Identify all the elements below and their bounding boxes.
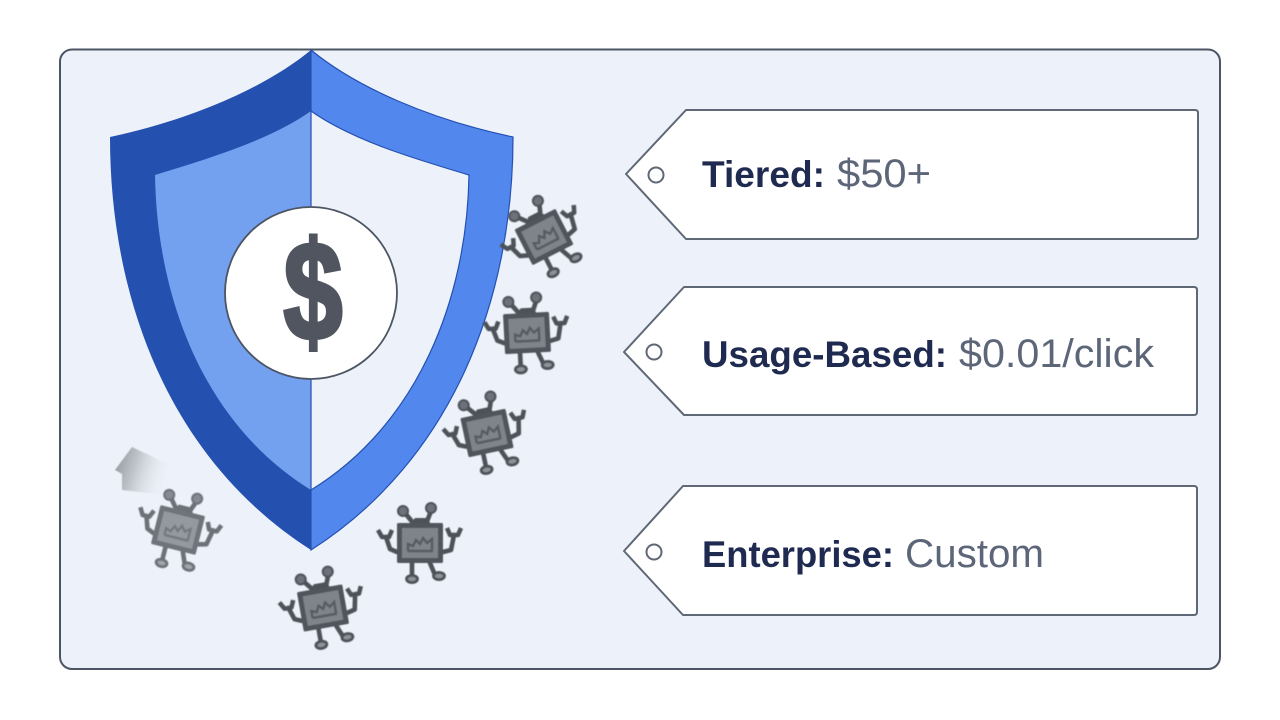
price tag: Tiered bbox=[626, 110, 1198, 239]
icon: broken robot fragment bbox=[115, 447, 176, 496]
price tag: Tiered: $50+ bbox=[837, 152, 931, 196]
dollar medallion: $ bbox=[284, 214, 342, 370]
icon: robot 5 bbox=[275, 561, 370, 654]
icon: robot 1 bbox=[488, 183, 599, 291]
price tag: Tiered: Tiered: bbox=[702, 154, 825, 195]
dollar medallion bbox=[225, 207, 397, 379]
price tag: Enterprise bbox=[624, 486, 1197, 615]
shield outer right half bbox=[311, 50, 513, 550]
price tag: Usage-Based: Usage-Based: bbox=[702, 334, 947, 375]
icon: shield with dollar bbox=[110, 50, 513, 550]
price tag: Usage-Based bbox=[624, 287, 1197, 415]
icon: robot 2 bbox=[483, 291, 570, 375]
panel: pricing background bbox=[60, 50, 1220, 669]
shield inner left half bbox=[155, 111, 311, 490]
icon: robot 3 bbox=[438, 385, 535, 480]
icon: robot 6 bbox=[128, 481, 227, 578]
icon: robot 4 bbox=[378, 503, 461, 583]
shield outer left half bbox=[110, 50, 311, 550]
price tag: Usage-Based: $0.01/click bbox=[959, 332, 1155, 376]
shield inner right half bbox=[311, 111, 469, 490]
price tag: Enterprise: Custom bbox=[905, 532, 1044, 576]
price tag: Enterprise: Enterprise: bbox=[702, 534, 894, 575]
